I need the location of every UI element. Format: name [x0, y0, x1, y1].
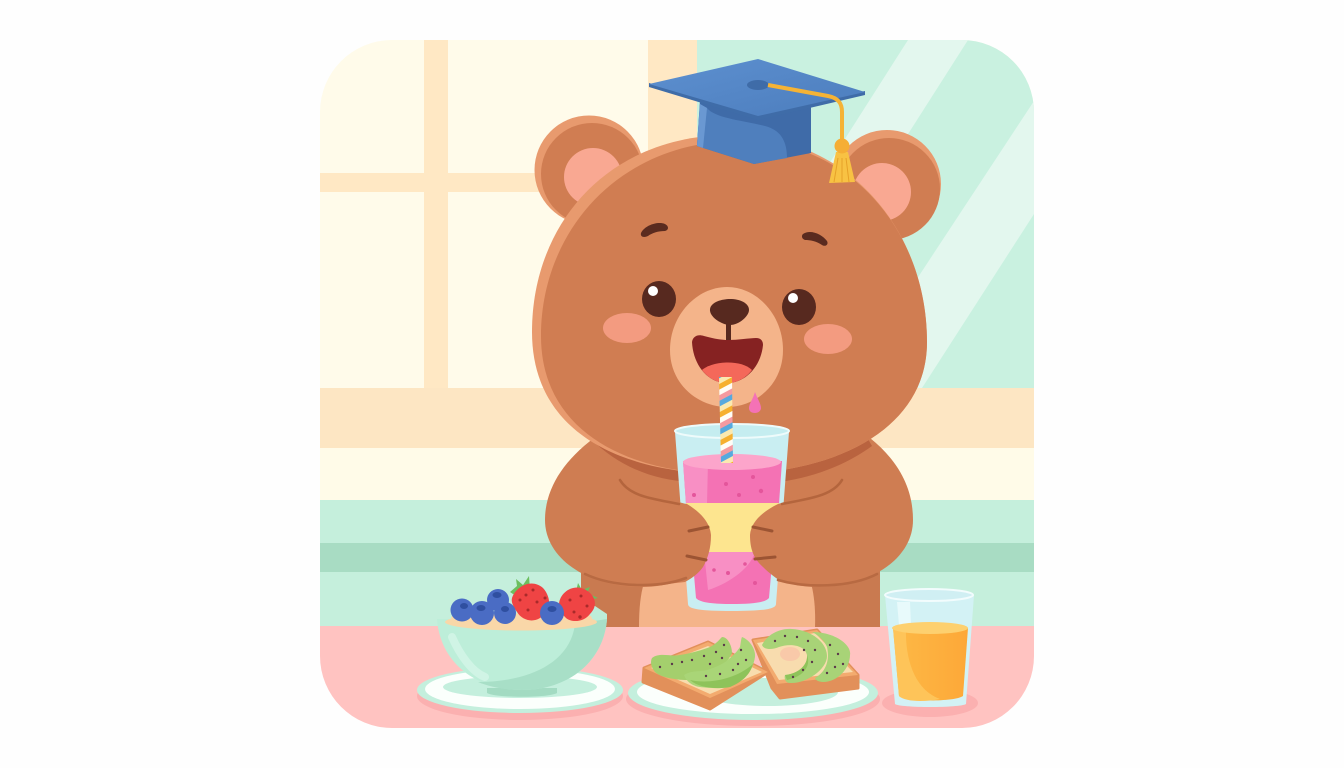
arm crease lines [585, 480, 877, 585]
neck shadow [590, 425, 872, 482]
avocado slices [812, 632, 850, 682]
strawberries [510, 576, 598, 621]
icon: eyes [642, 281, 816, 325]
oatmeal [445, 614, 597, 630]
bear [532, 116, 941, 627]
avocado slices [651, 637, 732, 680]
right toast [753, 629, 858, 698]
icon: pink drop [749, 392, 761, 413]
tassel [768, 85, 855, 183]
glass of layered smoothie [675, 424, 789, 611]
left toast [643, 637, 768, 709]
graduation cap [649, 59, 865, 183]
icon: right ear [833, 130, 941, 240]
head [532, 135, 927, 474]
breakfast: avocado toast on plate [626, 629, 880, 726]
icon: nose [710, 299, 749, 344]
icon: mouth [692, 335, 763, 383]
illustration: graduate bear breakfast [320, 40, 1034, 728]
blueberries [450, 589, 564, 625]
panel: kitchen background [320, 40, 1034, 728]
icon: eyebrows [641, 223, 828, 246]
hands holding glass [585, 480, 877, 587]
breakfast: oatmeal bowl on plate [417, 576, 623, 720]
muzzle [670, 287, 783, 407]
orange juice glass [882, 589, 978, 717]
striped straw [719, 377, 733, 463]
arms [545, 438, 913, 587]
icon: left ear [534, 116, 644, 225]
icon: cheeks [603, 313, 852, 354]
torso and belly [581, 540, 880, 627]
finger lines [687, 527, 775, 560]
